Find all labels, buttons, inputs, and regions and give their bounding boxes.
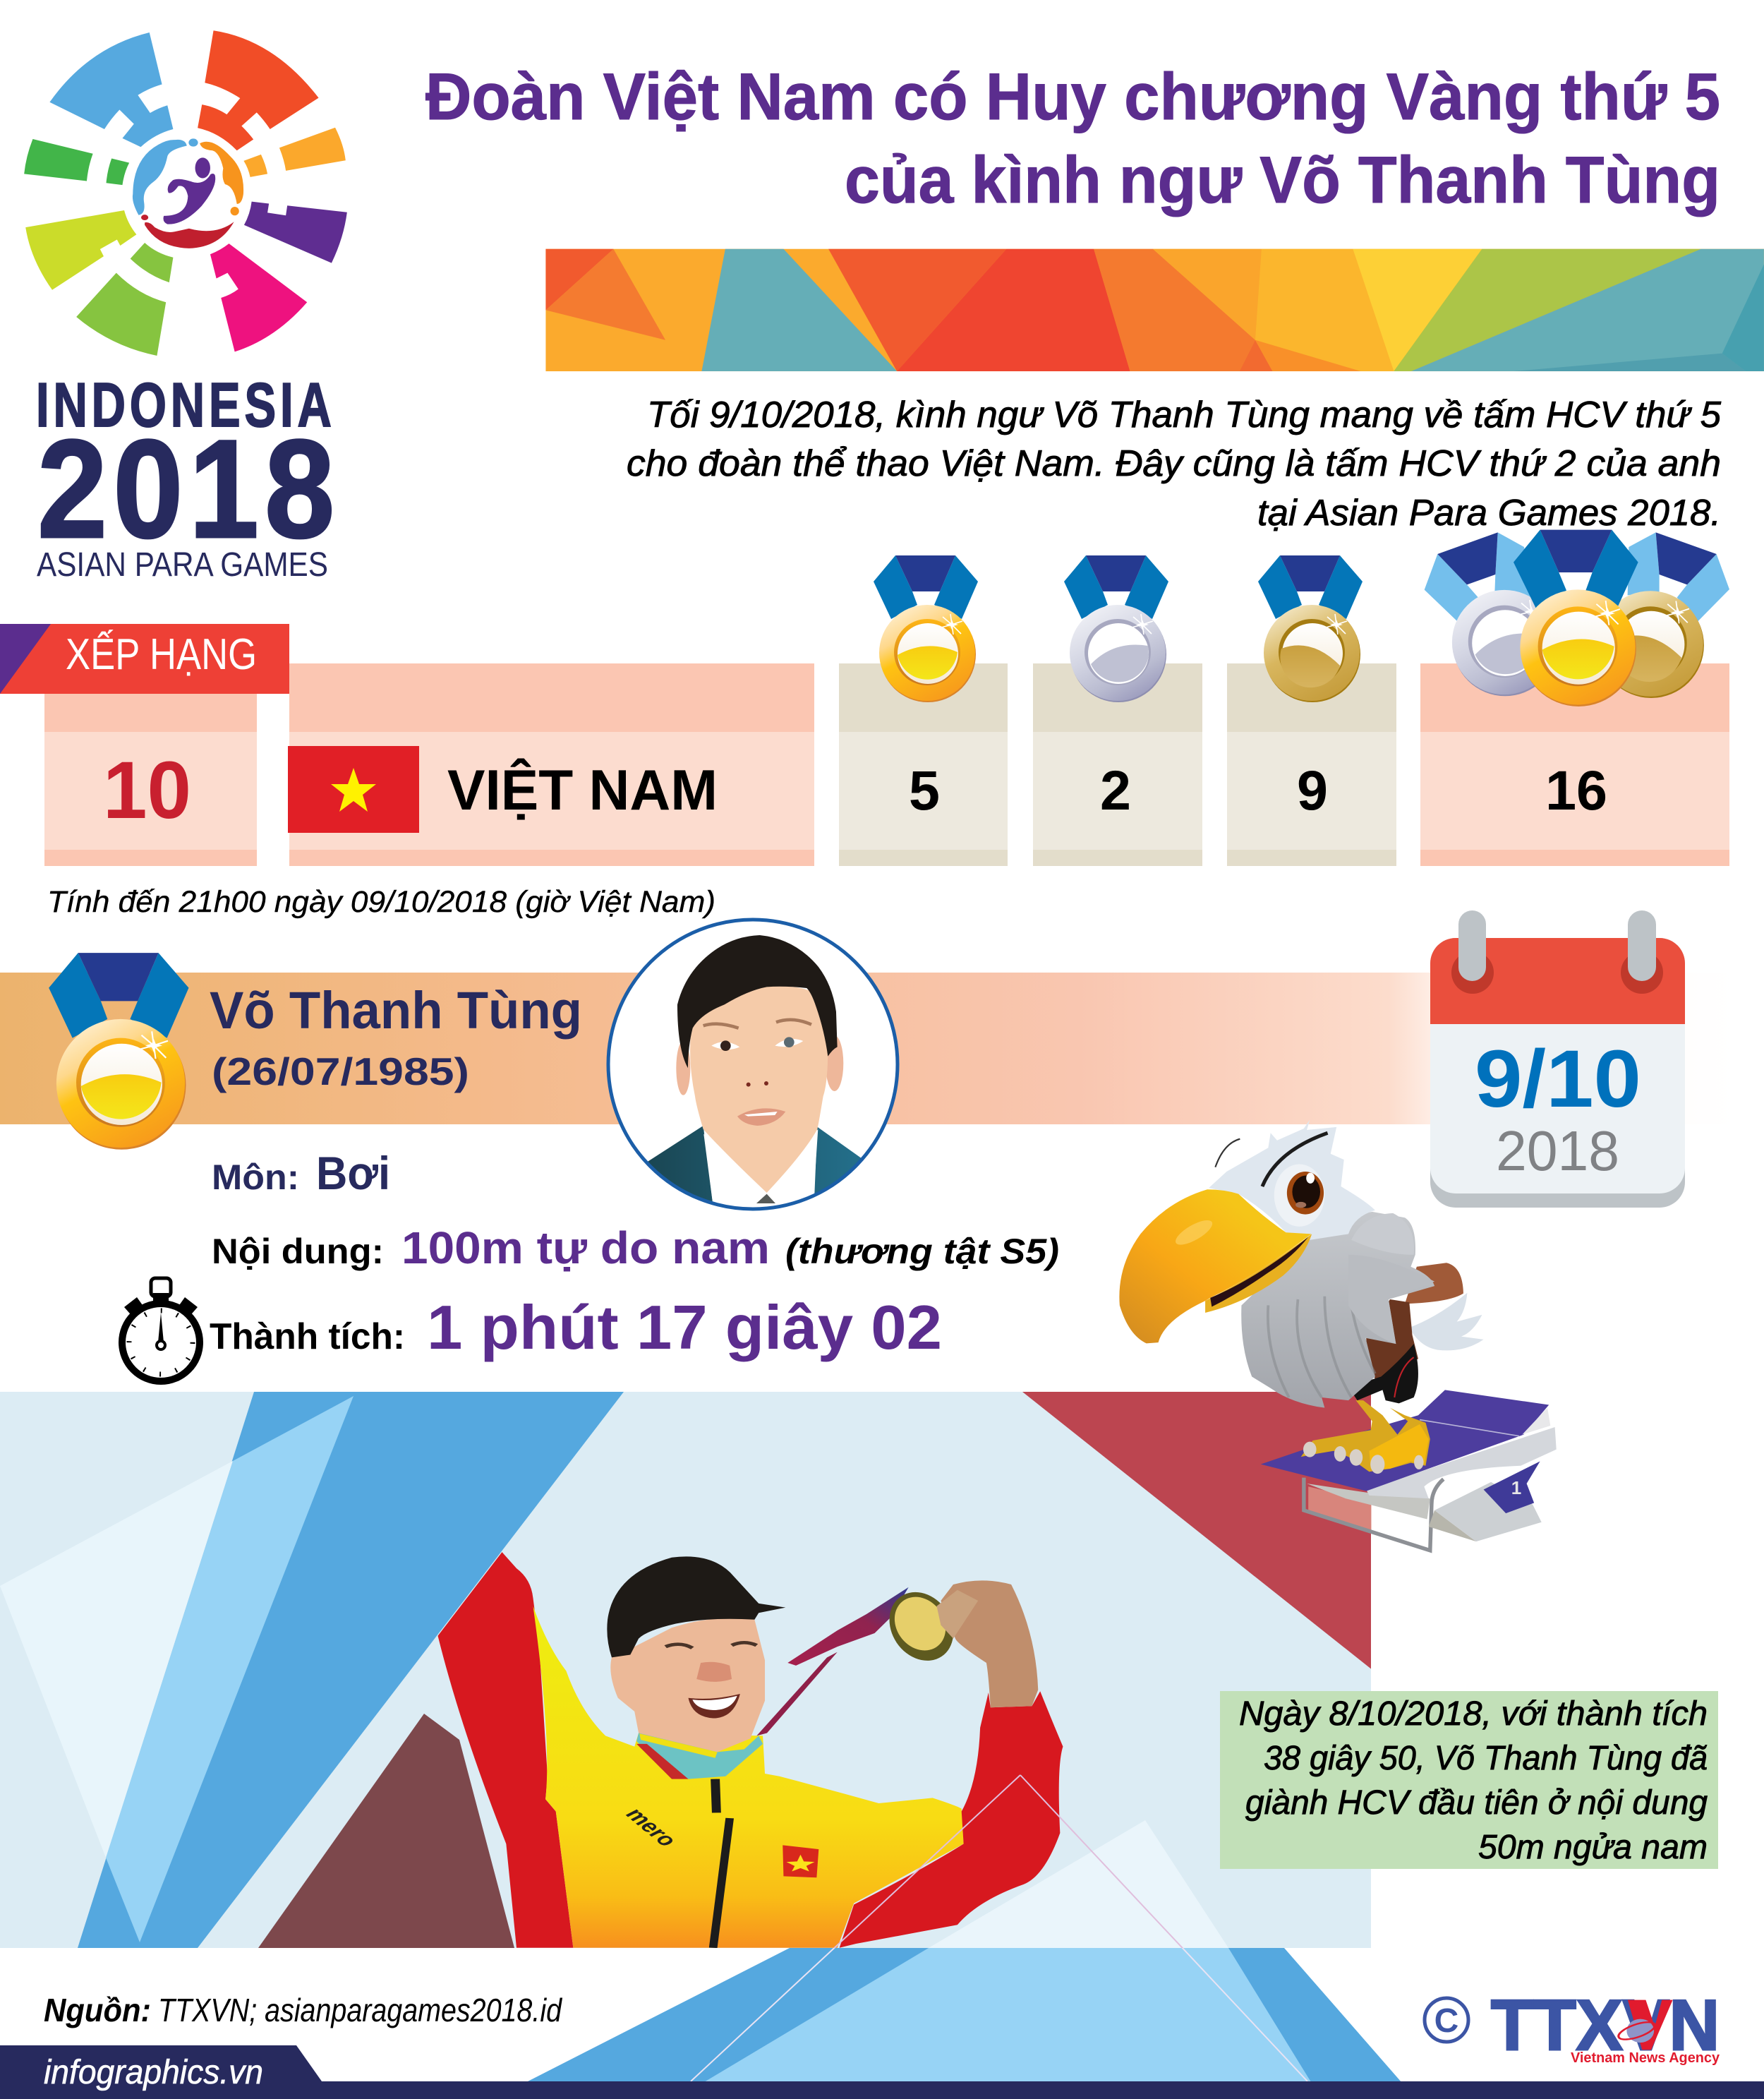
intro text: cho đoàn thể thao Việt Nam. Đây cũng là tấm HCV thứ 2 của anh bbox=[627, 443, 1721, 484]
footer bar bbox=[0, 2045, 1764, 2099]
logo emblem bbox=[24, 30, 347, 356]
ribbon: ranking heading bbox=[0, 624, 289, 694]
ribbon: ranking heading: XẾP HẠNG bbox=[66, 630, 257, 679]
column: total bbox=[1420, 663, 1729, 866]
note: data time: Tính đến 21h00 ngày 09/10/2018 (giờ Việt Nam) bbox=[47, 885, 715, 919]
detail: result bbox=[210, 1292, 942, 1362]
column: country: VIỆT NAM bbox=[447, 758, 718, 822]
logo wordmark INDONESIA: INDONESIA bbox=[36, 370, 332, 440]
detail: sport bbox=[212, 1147, 390, 1199]
icon: bronze medal bbox=[1258, 555, 1363, 702]
icon: silver medal bbox=[1064, 555, 1168, 702]
eagle bbox=[1119, 1119, 1484, 1474]
source: Nguồn: bbox=[44, 1992, 151, 2028]
intro text: tại Asian Para Games 2018. bbox=[1257, 493, 1721, 534]
detail: result: 1 phút 17 giây 02 bbox=[427, 1292, 942, 1362]
logo wordmark 2018: 2018 bbox=[37, 410, 334, 567]
athlete band bbox=[0, 973, 1736, 1124]
logo: TTXVN: TTXVN bbox=[1491, 1986, 1720, 2065]
icon: gold medal bbox=[874, 555, 978, 702]
icon: Vietnam flag bbox=[288, 746, 419, 833]
logo: TTXVN: Vietnam News Agency bbox=[1571, 2050, 1720, 2066]
title: Đoàn Việt Nam có Huy chương Vàng thứ 5 bbox=[425, 59, 1720, 133]
logo: TTXVN: C bbox=[1434, 2002, 1458, 2040]
starting block: 1 bbox=[1511, 1477, 1521, 1498]
athlete name: Võ Thanh Tùng bbox=[210, 981, 582, 1040]
mascot: eagle on starting block bbox=[1119, 1119, 1557, 1551]
detail: event bbox=[212, 1222, 1059, 1273]
detail: result: Thành tích: bbox=[210, 1316, 405, 1357]
column: bronze count bbox=[1227, 663, 1396, 866]
detail: event: 100m tự do nam bbox=[401, 1222, 770, 1273]
bottom blue shapes bbox=[526, 1948, 1401, 2082]
detail: sport: Môn: bbox=[212, 1157, 299, 1197]
callout: first gold medal bbox=[1220, 1691, 1718, 1869]
column: rank bbox=[44, 663, 257, 866]
logo: Indonesia 2018 Asian Para Games bbox=[24, 30, 347, 584]
column: bronze count: 9 bbox=[1297, 759, 1328, 822]
column: gold count bbox=[839, 663, 1008, 866]
athlete: mero bbox=[620, 1805, 684, 1850]
calendar: 9/10 2018: 9/10 bbox=[1475, 1034, 1641, 1124]
icon: large gold medal bbox=[49, 953, 188, 1150]
detail: sport: Bơi bbox=[316, 1147, 390, 1199]
column: rank: 10 bbox=[103, 745, 191, 836]
icon: stopwatch bbox=[119, 1278, 203, 1385]
column: country bbox=[288, 663, 814, 866]
ranking table bbox=[44, 663, 1729, 866]
callout: first gold medal: 38 giây 50, Võ Thanh Tùng đã bbox=[1264, 1740, 1708, 1777]
column: total: 16 bbox=[1545, 759, 1607, 822]
detail: event: Nội dung: bbox=[212, 1232, 384, 1271]
calendar: 9/10 2018: 2018 bbox=[1496, 1119, 1619, 1182]
starting block bbox=[1261, 1390, 1557, 1551]
logo wordmark Asian Para Games: ASIAN PARA GAMES bbox=[37, 546, 328, 584]
thin triangle lines below panel bbox=[690, 1948, 1308, 2081]
icon: three medals bbox=[1425, 530, 1729, 706]
source bbox=[44, 1992, 562, 2028]
callout: first gold medal: Ngày 8/10/2018, với thành tích bbox=[1239, 1695, 1708, 1733]
photo panel: athlete with medal bbox=[0, 1392, 1383, 2081]
athlete bbox=[438, 1552, 1063, 1948]
column: gold count: 5 bbox=[909, 759, 940, 822]
intro text: Tối 9/10/2018, kình ngư Võ Thanh Tùng mang về tấm HCV thứ 5 bbox=[647, 395, 1722, 435]
callout: first gold medal: giành HCV đầu tiên ở nội dung bbox=[1245, 1784, 1708, 1822]
calendar: 9/10 2018 bbox=[1430, 910, 1685, 1208]
title bbox=[425, 59, 1720, 217]
source: TTXVN; asianparagames2018.id bbox=[158, 1992, 562, 2028]
athlete birth date: (26/07/1985) bbox=[212, 1050, 469, 1093]
footer bar: infographics.vn bbox=[44, 2054, 263, 2091]
column: silver count: 2 bbox=[1100, 759, 1131, 822]
detail: event: (thương tật S5) bbox=[785, 1232, 1059, 1271]
intro text bbox=[627, 395, 1722, 534]
column: silver count bbox=[1033, 663, 1202, 866]
portrait bbox=[608, 920, 898, 1212]
callout: first gold medal: 50m ngửa nam bbox=[1478, 1829, 1708, 1866]
banner: colourful polygons bbox=[545, 249, 1764, 371]
title: của kình ngư Võ Thanh Tùng bbox=[845, 143, 1720, 217]
